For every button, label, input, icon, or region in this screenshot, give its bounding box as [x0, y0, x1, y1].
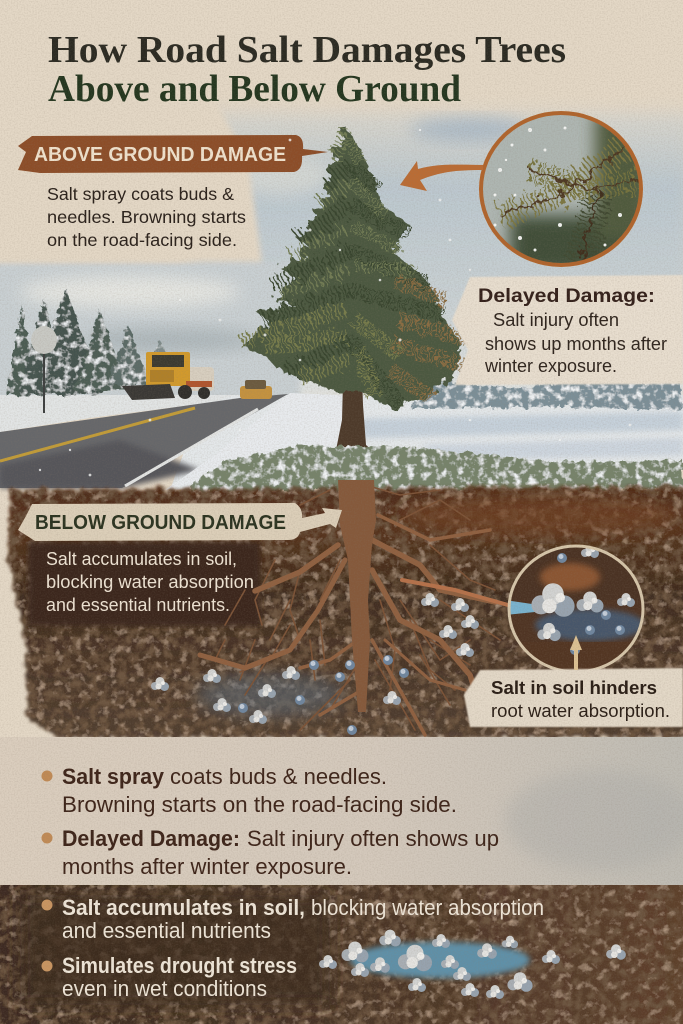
- icon: tree: [240, 126, 470, 450]
- bullet: drought stress: Simulates drought stress: [62, 953, 297, 978]
- panel: salt in soil callout: [464, 668, 683, 727]
- soil body: [8, 488, 683, 738]
- bullet: delayed damage: Delayed Damage:: [62, 826, 240, 851]
- taproot: [338, 480, 376, 712]
- tree trunk: [336, 345, 372, 450]
- orange root to magnifier: [402, 580, 508, 605]
- snowfall: [39, 129, 631, 476]
- arrow: magnifier to tree: [400, 161, 483, 191]
- panel: below ground bullets: [0, 870, 683, 1024]
- car: [240, 380, 272, 399]
- heading: above ground damage ribbon: [18, 135, 328, 173]
- delayed damage text: winter exposure.: [484, 356, 617, 376]
- far trees right: [410, 378, 683, 410]
- browning boughs: [390, 280, 470, 398]
- panel: soil cross-section: [8, 480, 683, 738]
- title: Above and Below Ground: [48, 68, 461, 110]
- bullet: salt spray: Browning starts on the road-facing side.: [62, 792, 457, 817]
- snow bank right of road: [165, 393, 345, 490]
- white road line: [125, 409, 258, 486]
- callout text: root water absorption.: [491, 701, 670, 721]
- parchment panel behind above-ground text: [0, 100, 262, 262]
- bullet: salt spray: [42, 764, 457, 817]
- dark boughs: [262, 165, 445, 405]
- ground cover band: [190, 445, 683, 492]
- snow bank left: [0, 395, 235, 432]
- bullet: delayed damage: [42, 826, 505, 879]
- medium roots: [200, 515, 495, 735]
- delayed damage text: Salt injury often: [493, 310, 619, 330]
- light green boughs: [280, 130, 415, 295]
- text: above ground description: Salt spray coats buds &: [47, 184, 234, 204]
- bullet: salt accumulates: blocking water absorption: [311, 895, 544, 920]
- yellow road line: [0, 408, 195, 461]
- olive lower boughs: [240, 310, 400, 398]
- panel: winter scene above ground: [0, 112, 683, 490]
- heading: below ground damage ribbon: BELOW GROUND DAMAGE: [35, 512, 286, 534]
- fine roots: [215, 485, 500, 730]
- rust soil band: [400, 495, 680, 535]
- panel: delayed damage callout: [452, 275, 683, 385]
- title: [48, 29, 566, 110]
- icon: soil magnifier circle: [505, 540, 645, 677]
- bullet: delayed damage: months after winter exposure.: [62, 854, 352, 879]
- bullet: salt accumulates: and essential nutrients: [62, 918, 271, 943]
- text: above ground description: on the road-facing side.: [47, 230, 237, 250]
- snow field right: [170, 395, 683, 490]
- tree foliage: [240, 126, 470, 410]
- heading: above ground damage ribbon: ABOVE GROUND DAMAGE: [34, 144, 286, 166]
- bullet: salt spray: coats buds & needles.: [170, 764, 387, 789]
- panel: above ground bullets: [0, 737, 683, 885]
- arrow: up to soil magnifier: [570, 635, 582, 670]
- salt puddle: [319, 930, 626, 999]
- bullet: drought stress: [42, 953, 303, 1001]
- faint blue salt wash: [195, 673, 345, 717]
- sky: [190, 112, 683, 402]
- snowy evergreens: [6, 288, 175, 395]
- text: above ground description: needles. Browning starts: [47, 207, 246, 227]
- text: below ground description: and essential nutrients.: [46, 595, 230, 615]
- text: below ground description: Salt accumulates in soil,: [46, 549, 237, 569]
- road sign: [31, 326, 57, 413]
- salt crystals in soil: [151, 593, 479, 735]
- delayed damage text: shows up months after: [485, 334, 667, 354]
- heading: below ground damage ribbon: [18, 503, 342, 541]
- bullet: salt accumulates: [42, 895, 550, 943]
- callout heading: Salt in soil hinders: [491, 677, 657, 698]
- icon: needle magnifier circle: [479, 110, 650, 275]
- plow truck: [122, 352, 214, 400]
- title: How Road Salt Damages Trees: [48, 29, 566, 71]
- bullet: drought stress: even in wet conditions: [62, 976, 267, 1001]
- bullet: salt spray: Salt spray: [62, 764, 164, 789]
- road: [0, 394, 288, 488]
- text: below ground description: blocking water absorption: [46, 572, 254, 592]
- roots: [200, 485, 508, 735]
- bullet: delayed damage: Salt injury often shows up: [247, 826, 499, 851]
- bullet: salt accumulates: Salt accumulates in soil,: [62, 895, 305, 920]
- dark backing for below-ground text: [28, 542, 260, 626]
- delayed damage heading: Delayed Damage:: [478, 286, 655, 307]
